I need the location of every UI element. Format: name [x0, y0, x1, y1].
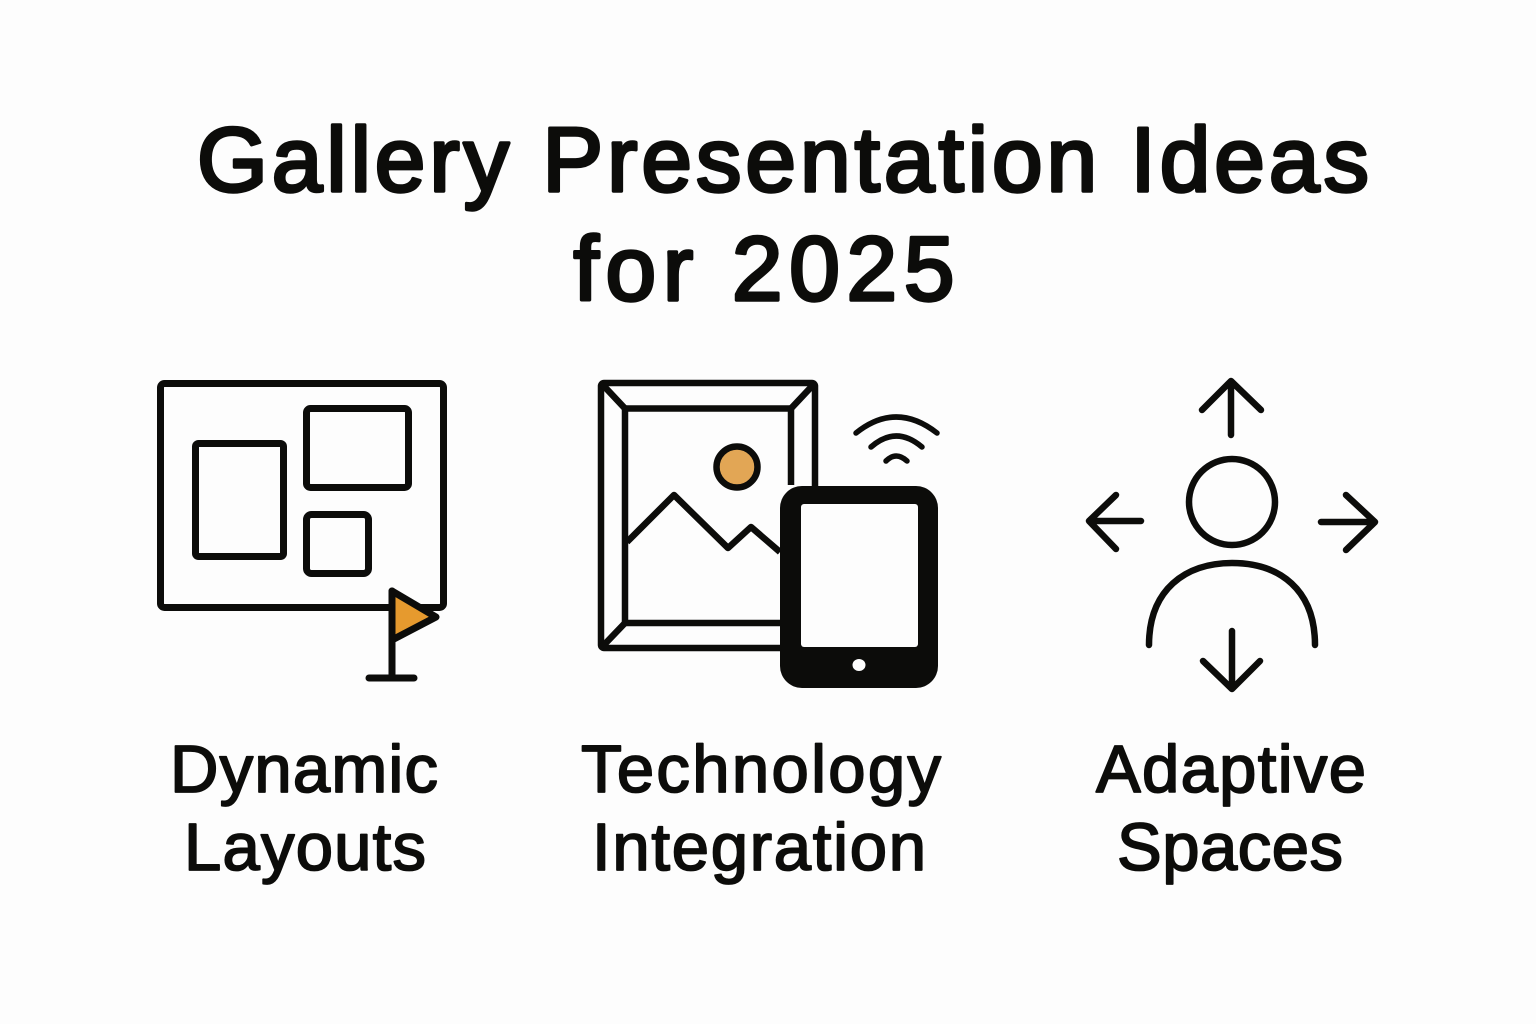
label: technology integration: Integration	[592, 810, 926, 885]
label: adaptive spaces: Spaces	[1117, 810, 1343, 885]
icon: person with four arrows	[1089, 381, 1375, 689]
label: dynamic layouts	[170, 732, 438, 885]
icon: wifi signal	[856, 417, 937, 461]
icon: orange flag	[369, 591, 436, 678]
title: for 2025	[574, 219, 954, 320]
label: technology integration: Technology	[581, 732, 942, 807]
icon: framed picture with tablet	[601, 383, 938, 688]
label: adaptive spaces: Adaptive	[1096, 732, 1366, 807]
label: adaptive spaces	[1096, 732, 1366, 885]
title: Gallery Presentation Ideas	[197, 110, 1369, 211]
icon: dynamic layouts wall with flag	[160, 384, 444, 678]
title	[197, 110, 1369, 320]
label: dynamic layouts: Layouts	[184, 810, 426, 885]
label: technology integration	[581, 732, 942, 885]
label: dynamic layouts: Dynamic	[170, 732, 438, 807]
icon: tablet	[780, 486, 938, 688]
